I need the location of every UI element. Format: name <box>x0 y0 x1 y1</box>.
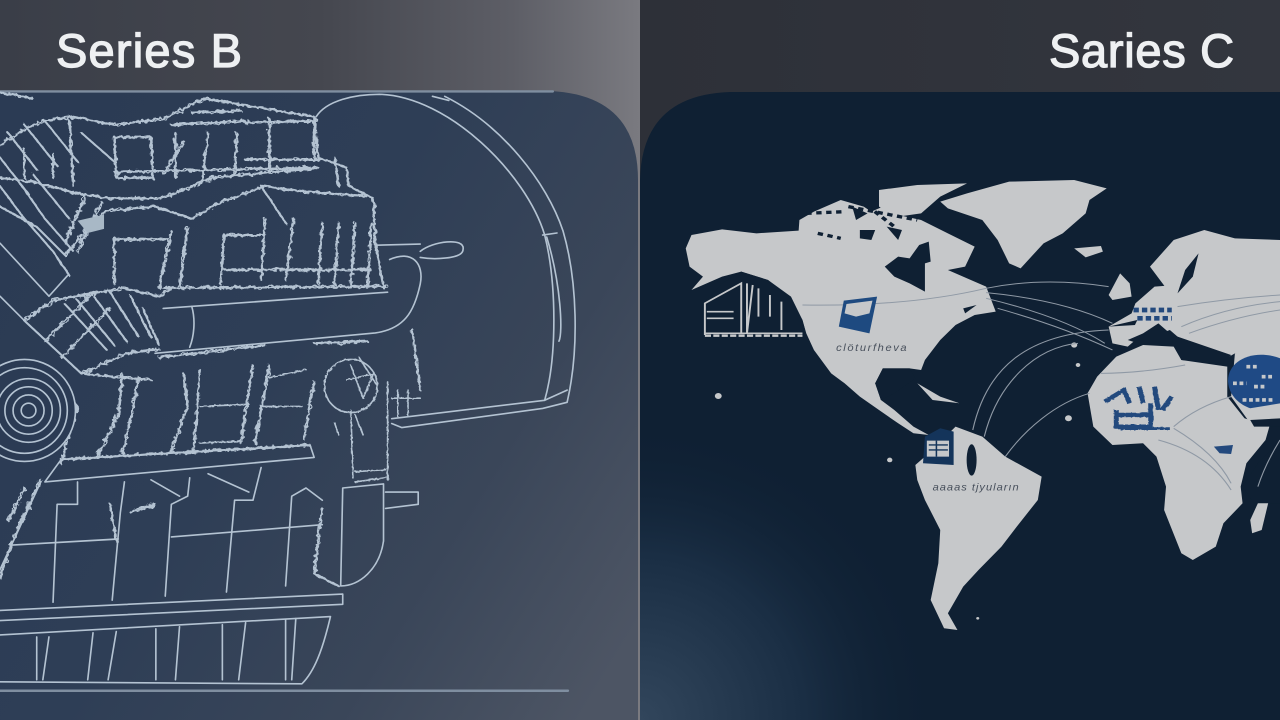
route lines <box>802 282 1280 490</box>
map shapes <box>686 180 1280 630</box>
heading: Series B: Series B <box>56 24 243 77</box>
right header band <box>640 0 1280 720</box>
pulley <box>0 359 75 461</box>
panel: world map <box>640 92 1280 720</box>
icon: globe badge <box>1228 355 1280 408</box>
icon: africa facility <box>1105 387 1172 429</box>
frame lines <box>0 91 568 691</box>
intake pipe <box>155 242 463 353</box>
icon: south america facility <box>923 428 954 465</box>
icon: east africa mark <box>1214 445 1233 454</box>
panel: engine blueprint <box>0 91 638 720</box>
doubled chain texture <box>0 92 420 586</box>
land <box>686 180 1280 630</box>
oil pan <box>0 594 343 684</box>
left header band <box>0 0 640 720</box>
heading: Saries C: Saries C <box>1049 24 1235 77</box>
middle details <box>200 357 420 482</box>
dome cover <box>316 94 575 428</box>
strap <box>0 243 67 321</box>
icon: west coast facility <box>703 272 806 338</box>
icon: blue map badge <box>839 297 877 333</box>
label: north america: clöturfheva <box>836 344 907 354</box>
engine line drawing <box>0 91 575 691</box>
icon: europe facility <box>1133 310 1172 318</box>
water bodies <box>806 200 1280 503</box>
upper block, rough <box>0 92 420 586</box>
solid fleck <box>78 215 104 233</box>
label: south america: aaaas tjyuların <box>933 483 1019 493</box>
arctic speckle <box>806 200 917 238</box>
lower crankcase <box>0 445 418 602</box>
